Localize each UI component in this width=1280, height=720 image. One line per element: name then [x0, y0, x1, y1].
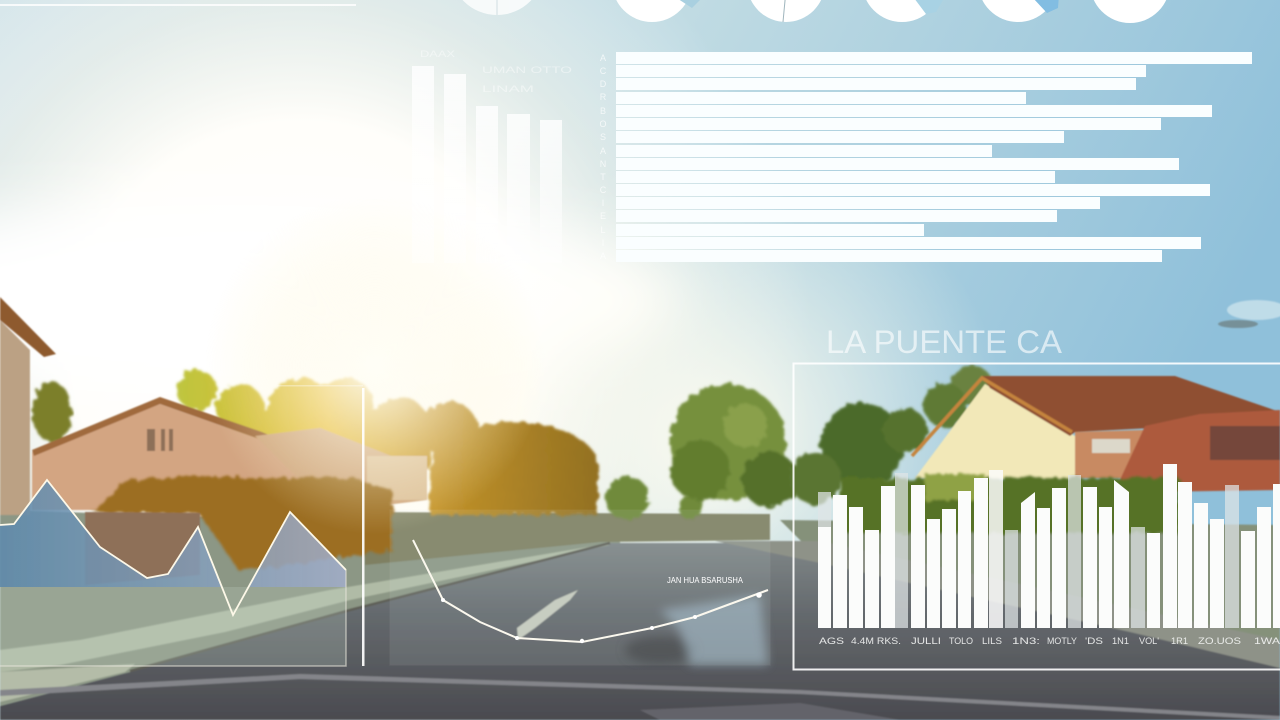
horizontal bar chart	[599, 52, 1252, 262]
panel tint	[0, 587, 346, 666]
curve	[413, 540, 768, 642]
right trees	[789, 365, 992, 504]
axis labels: 1WA	[1254, 636, 1280, 646]
pie charts row	[450, 0, 1170, 23]
road highlight	[517, 590, 578, 640]
axis labels: 'DS	[1085, 636, 1103, 646]
chart note: JAN HUA BSARUSHA	[667, 576, 744, 585]
fence	[365, 512, 770, 565]
left ground	[0, 510, 620, 706]
row labels: D	[600, 79, 607, 89]
row labels: I	[602, 198, 604, 208]
gable trim	[912, 378, 1072, 456]
right house balcony	[1210, 426, 1280, 460]
row labels: S	[600, 132, 606, 142]
white haze band	[0, 205, 680, 395]
cloud wisp	[1218, 300, 1280, 328]
row labels: N	[600, 159, 606, 169]
column labels: UMAN OTTO	[482, 65, 572, 75]
right ground	[780, 520, 1280, 668]
right sidewalk	[715, 541, 1280, 668]
pie 5	[978, 0, 1060, 22]
middle house	[32, 397, 427, 510]
axis labels: JULLI	[911, 636, 941, 646]
row labels: R	[600, 92, 607, 102]
row labels: T	[600, 172, 606, 182]
column labels: LINAM	[482, 84, 534, 94]
right house lower roof	[1118, 410, 1280, 492]
axis labels	[819, 636, 1280, 646]
translucent grey columns	[818, 473, 1239, 628]
axis labels: LILS	[982, 636, 1002, 646]
left sidewalk	[0, 545, 610, 672]
pie 2	[612, 0, 700, 22]
line chart panel	[390, 510, 770, 665]
row labels: O	[599, 119, 607, 129]
row labels: I	[602, 238, 604, 248]
left hedge	[92, 476, 392, 572]
left house	[0, 297, 56, 515]
right house windows	[1092, 439, 1130, 453]
small column chart	[412, 49, 572, 263]
right house annex	[1075, 430, 1145, 478]
vertical divider line	[277, 385, 364, 666]
column labels: DAAX	[420, 49, 455, 59]
axis labels: 4.4M RKS.	[851, 636, 901, 646]
panel frame	[794, 364, 1280, 670]
row labels: C	[600, 185, 607, 195]
golden trees	[177, 370, 599, 515]
axis labels: 1N3:	[1012, 636, 1040, 646]
title: LA PUENTE CA	[826, 324, 1063, 360]
left wall	[85, 512, 200, 585]
right bar chart panel	[794, 364, 1280, 670]
row labels: A	[600, 53, 606, 63]
area line	[0, 480, 346, 615]
column labels	[420, 49, 572, 94]
axis labels: 1N1	[1112, 636, 1129, 646]
axis labels: ZO.UOS	[1198, 636, 1241, 646]
row labels: A	[600, 251, 606, 261]
row labels: L	[600, 225, 606, 235]
row labels: A	[600, 146, 606, 156]
area chart panel	[0, 480, 346, 666]
right hedge	[840, 474, 1180, 533]
sun glare	[150, 180, 610, 550]
panel background	[390, 510, 770, 665]
axis labels: 1R1	[1171, 636, 1188, 646]
white columns	[818, 464, 1280, 628]
right house wall	[915, 384, 1075, 480]
road marking	[640, 703, 900, 720]
axis labels: AGS	[819, 636, 844, 646]
top left rule	[0, 4, 356, 6]
pie 6	[1090, 0, 1170, 23]
horizon haze	[400, 150, 1040, 550]
distant trees	[605, 476, 702, 520]
left sidewalk front	[0, 664, 135, 702]
row labels: B	[600, 106, 606, 116]
axis labels: MOTLY	[1047, 636, 1077, 646]
columns	[412, 66, 562, 263]
row labels	[599, 53, 607, 261]
road centre stripe	[0, 674, 1280, 720]
row labels: C	[600, 66, 607, 76]
ghost shape	[660, 595, 768, 665]
axis labels: TOLO	[949, 636, 973, 646]
curve markers	[441, 592, 762, 643]
row labels: E	[600, 211, 606, 221]
bars	[616, 52, 1252, 262]
far left tree	[32, 382, 72, 442]
photo scene: street and houses	[0, 297, 1280, 720]
centre green tree	[670, 384, 798, 508]
panel edge	[0, 570, 346, 666]
pie 3	[747, 0, 825, 22]
pie 1	[450, 0, 544, 15]
curb line	[130, 543, 610, 671]
right house roof	[982, 376, 1280, 436]
pie 4	[862, 0, 946, 22]
road surface	[0, 543, 1280, 720]
axis labels: VOL'	[1139, 636, 1159, 646]
blue area fill	[0, 482, 346, 587]
dark shadow	[625, 636, 695, 664]
